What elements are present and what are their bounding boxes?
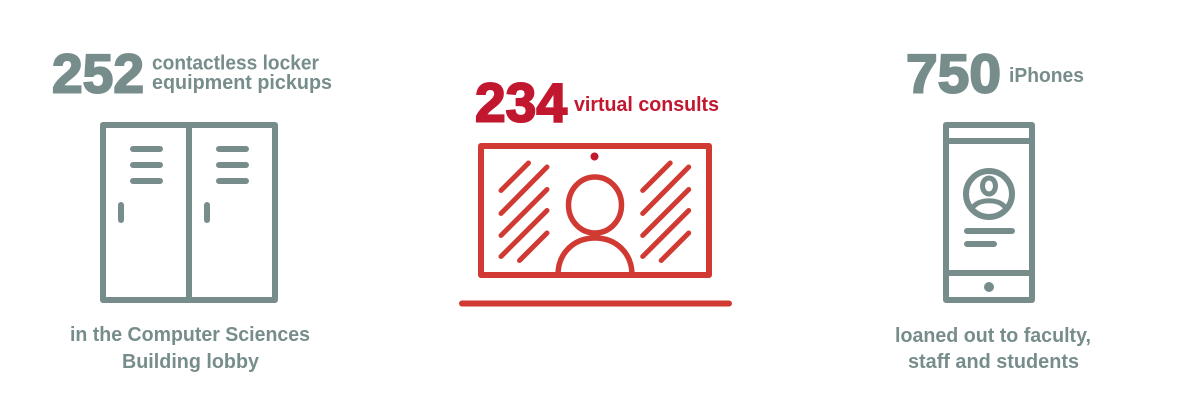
stat number: 234: 234 [475, 72, 567, 134]
panel: iPhones loaned [895, 42, 1091, 373]
icon: laptop video call [462, 146, 729, 304]
panel: virtual consults [462, 72, 729, 304]
stat number: 252: 252 [52, 42, 144, 104]
panel: locker pickups [52, 42, 332, 373]
caption: in the Computer Sciences Building lobby [70, 324, 310, 373]
icon: lockers [103, 125, 275, 300]
stat label: contactless locker equipment pickups: contactless locker [152, 52, 319, 74]
caption: loaned out to faculty, staff and students [895, 325, 1091, 373]
stat label: virtual consults: virtual consults [574, 94, 719, 116]
caption: loaned out to faculty, staff and students: staff and students [908, 351, 1079, 373]
stat label: contactless locker equipment pickups: equipment pickups [152, 72, 332, 94]
caption: loaned out to faculty, staff and students: loaned out to faculty, [895, 325, 1091, 347]
stat label: contactless locker equipment pickups [152, 52, 332, 94]
caption: in the Computer Sciences Building lobby: Building lobby [122, 351, 260, 373]
icon: phone with contact [946, 125, 1032, 300]
stat number: 750: 750 [906, 42, 1001, 104]
caption: in the Computer Sciences Building lobby: in the Computer Sciences [70, 324, 310, 346]
stat label: iPhones: iPhones [1009, 65, 1084, 87]
